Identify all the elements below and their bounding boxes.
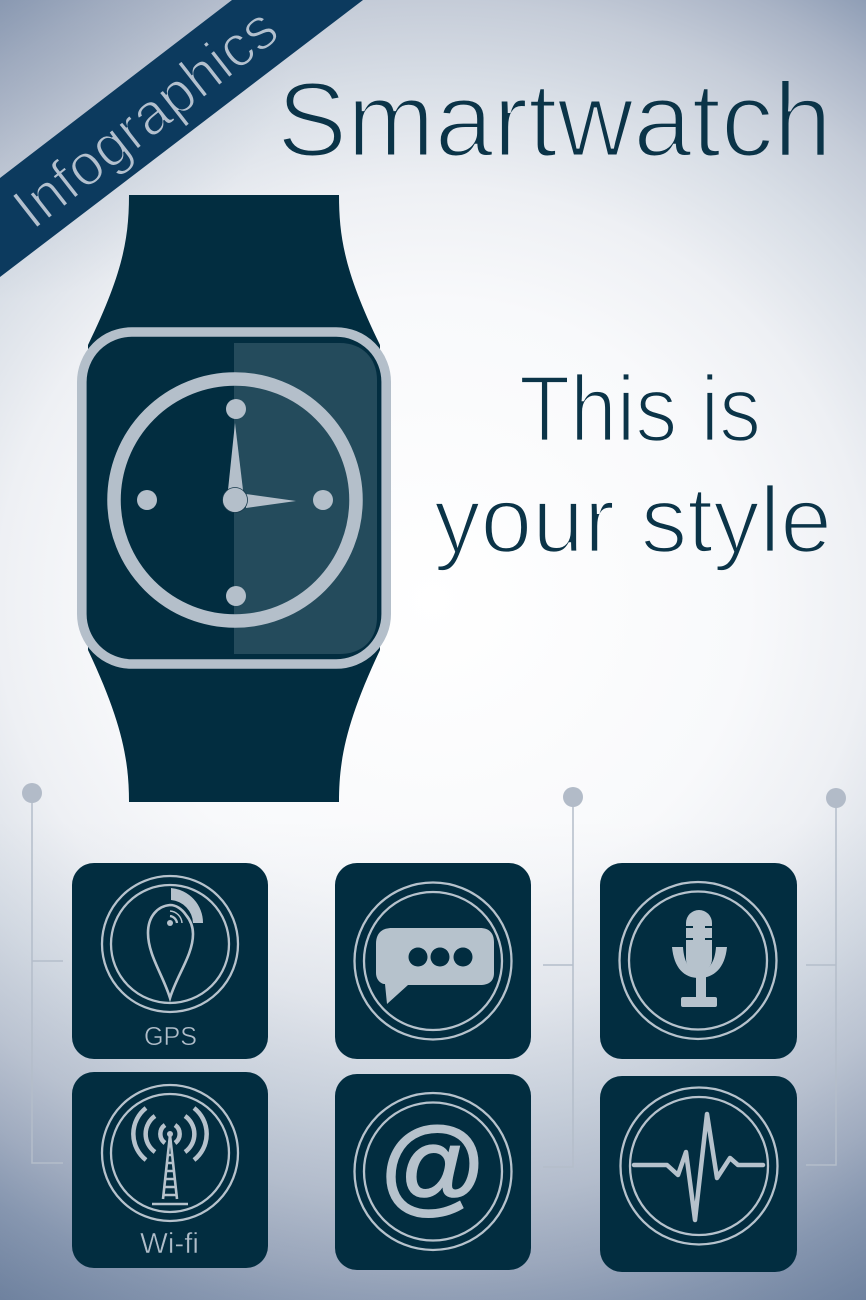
tile: microphone [600,863,797,1059]
tile: heart rate [600,1076,797,1272]
watch strap [88,195,380,802]
tile: email [335,1074,531,1270]
watch case [82,332,386,664]
tagline: This is [519,356,761,461]
tile: Wi-Fi: Wi-fi [140,1228,199,1260]
tile: GPS: GPS [144,1021,197,1051]
tile: email: @ [379,1107,487,1225]
clock face [114,379,356,621]
connector lines [32,793,836,1167]
tile: Wi-Fi [72,1072,268,1268]
tile: messaging [335,863,531,1059]
tagline [434,356,832,572]
connector nodes [22,783,846,808]
smartwatch illustration [82,195,386,802]
screen highlight [234,343,377,654]
title: Smartwatch [277,61,832,179]
tagline: your style [434,467,832,572]
tile: GPS [72,863,268,1059]
